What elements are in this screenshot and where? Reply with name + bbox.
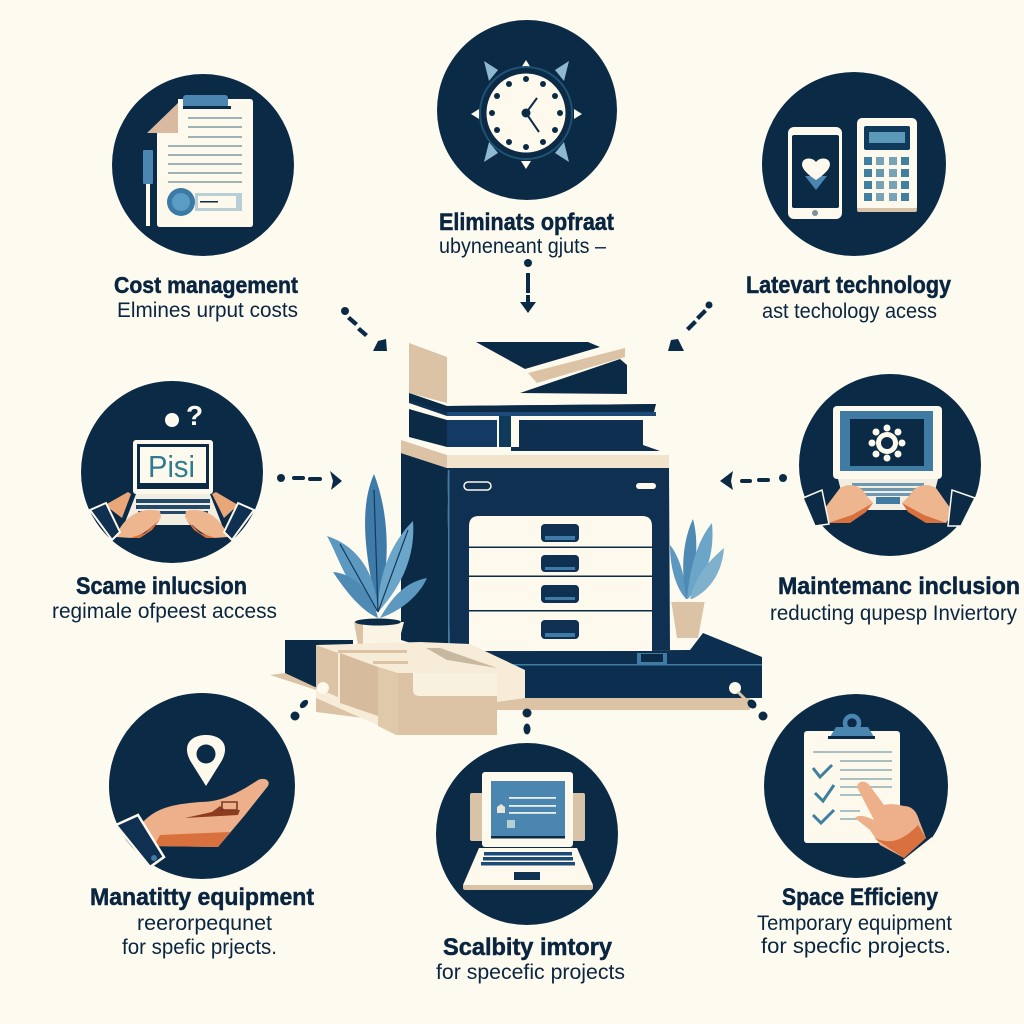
subtext: for specefic projects [436, 961, 625, 984]
panel: latest technology [746, 72, 952, 323]
icon: laptop [463, 772, 593, 890]
icon: open hand [116, 779, 269, 867]
plant: right [670, 519, 724, 638]
panel: scame inclusion [52, 381, 277, 623]
icon: map pin [187, 735, 225, 786]
icon: laptop with hands [90, 440, 254, 540]
heading: Maintemanc inclusion [778, 573, 1020, 600]
arrow: clock to printer [520, 259, 536, 313]
icon: laptop with gear and hands [803, 406, 975, 526]
subtext: Elmines urput costs [117, 299, 298, 322]
icon: laptop with hands: Pisi [148, 449, 195, 484]
stacked boxes [316, 642, 525, 735]
central printer illustration [270, 342, 762, 735]
subtext: reducting qupesp Inviertory [770, 602, 1017, 625]
icon: clock [471, 60, 582, 169]
subtext line 2: for specfic projects. [761, 935, 951, 958]
subtext: reerorpequnet [137, 912, 272, 935]
heading: Eliminats opfraat [439, 209, 614, 236]
arrow: technology to printer [668, 302, 712, 351]
plant: left [327, 474, 427, 645]
scanner top [409, 342, 660, 451]
heading: Space Efficieny [782, 884, 939, 911]
panel: manatitty equipment [90, 693, 314, 959]
subtext: Temporary equipment [757, 912, 952, 935]
paper drawers [469, 516, 652, 651]
arrow: scalability to printer [522, 708, 532, 734]
subtext: ast techology acess [762, 300, 937, 323]
subtext line 2: for spefic prjects. [122, 936, 277, 959]
icon: question and gear: ? [186, 400, 203, 431]
arrow: maintenance to printer [720, 471, 787, 490]
heading: Cost management [114, 272, 298, 298]
icon: calculator [857, 118, 917, 212]
base platform [270, 633, 762, 735]
arrow: space to printer [729, 682, 768, 720]
icon: phone [788, 127, 842, 219]
heading: Manatitty equipment [90, 884, 314, 911]
panel: space efficiency [757, 694, 952, 958]
arrow: manatitty to printer [290, 682, 329, 720]
arrow: scame to printer [277, 471, 342, 490]
icon: clipboard with hand [804, 716, 935, 864]
arrow: cost to printer [341, 307, 387, 351]
subtext: regimale ofpeest access [52, 600, 277, 623]
panel: scalability [436, 743, 625, 984]
panel: maintenance inclusion [770, 374, 1020, 625]
printer body [401, 440, 670, 655]
heading: Latevart technology [746, 272, 952, 299]
panel: eliminates [437, 20, 617, 258]
subtext: ubyneneant gjuts – [439, 235, 606, 258]
icon: document with seal [143, 95, 253, 227]
heading: Scalbity imtory [443, 934, 613, 961]
heading: Scame inlucsion [76, 573, 247, 600]
icon: question and gear [165, 400, 203, 431]
panel: cost management [112, 74, 298, 322]
